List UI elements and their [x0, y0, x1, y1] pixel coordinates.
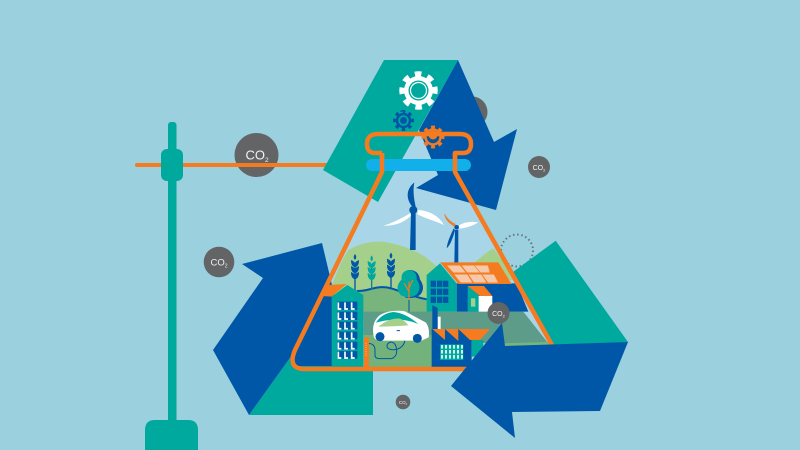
small annex — [468, 286, 492, 312]
CO2 bubble: behind top arrow — [456, 96, 488, 128]
CO2 bubble: on flask — [488, 302, 510, 324]
CO2 bubble: on flask: 2 — [503, 314, 506, 318]
CO2 bubble: small: CO — [399, 400, 406, 405]
dotted circle — [501, 234, 533, 266]
recycling arrow: blue bottom — [451, 323, 628, 438]
stream — [357, 287, 427, 299]
CO2 bubble: large — [234, 133, 278, 177]
green field — [357, 287, 430, 313]
retort stand — [145, 122, 198, 450]
wind turbine: large — [383, 182, 444, 250]
CO2 bubble: right: 2 — [543, 168, 546, 172]
solar panels — [447, 265, 498, 283]
charging cable — [368, 340, 406, 360]
recycling arrow: blue top — [416, 60, 517, 210]
house windows — [431, 281, 448, 303]
city scene inside flask — [322, 182, 550, 370]
CO2 bubble: large: CO — [245, 148, 265, 162]
CO2 bubble: left: CO — [210, 258, 225, 268]
electric car — [373, 311, 429, 343]
gear: white — [399, 71, 438, 110]
wheat: right — [387, 253, 395, 287]
wind turbine: small — [444, 213, 478, 263]
flask clamp band — [366, 159, 471, 171]
clamp rod — [137, 163, 367, 167]
CO2 bubble: small — [396, 395, 410, 409]
flask neck walls over band — [382, 153, 455, 172]
recycling arrow: blue left — [213, 243, 345, 415]
lower field — [363, 335, 437, 368]
tree — [398, 270, 423, 312]
grey-green field — [363, 312, 548, 345]
house with solar roof — [427, 262, 528, 312]
factory — [432, 305, 490, 370]
CO2 bubble: right — [528, 156, 550, 178]
gear: orange — [421, 125, 445, 149]
wheat: left — [351, 254, 359, 290]
recycling arrow: teal top — [323, 60, 458, 202]
CO2 bubble: right: CO — [533, 165, 543, 172]
left hill — [332, 242, 438, 312]
CO2 bubble: large: 2 — [265, 157, 269, 164]
right hill — [474, 248, 513, 280]
CO2 bubble: on flask: CO — [492, 311, 503, 318]
wheat: middle — [368, 255, 376, 290]
flask interior sky — [296, 134, 550, 366]
recycling arrow: teal right — [512, 241, 628, 350]
gear: blue — [393, 110, 414, 131]
charger post — [364, 337, 369, 368]
clamp block — [161, 149, 183, 181]
CO2 bubble: small: 2 — [406, 403, 408, 406]
flask outline — [293, 134, 552, 369]
tall building — [322, 284, 363, 367]
recycling arrow: teal lower left — [249, 355, 373, 415]
CO2 bubble: left: 2 — [225, 264, 228, 270]
CO2 bubble: left — [204, 247, 234, 277]
